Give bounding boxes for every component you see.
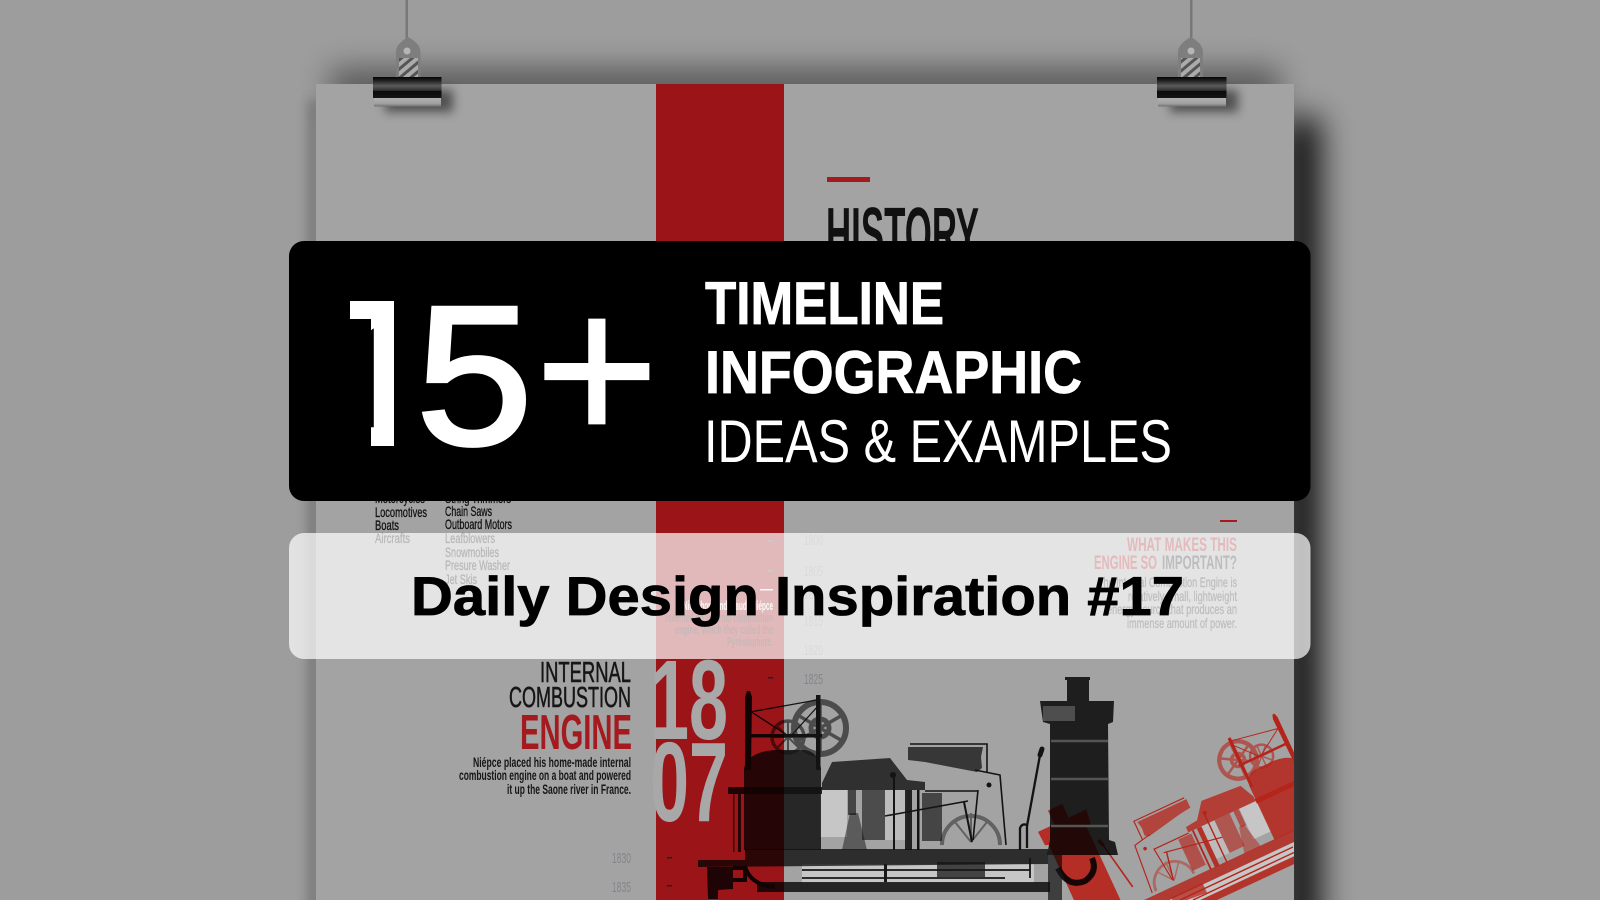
heading: internal combustion engine: COMBUSTION xyxy=(509,682,631,714)
right note: what makes this engine so important: The Internal Combustion Engine is xyxy=(1098,574,1237,590)
year: 1807 xyxy=(650,637,728,845)
paragraph: Niepce: combustion engine on a boat and powered xyxy=(459,767,631,783)
timeline ticks xyxy=(667,540,773,886)
right note: what makes this engine so important: immense amount of power. xyxy=(1127,615,1237,631)
right note: what makes this engine so important: WHAT MAKES THIS xyxy=(1127,534,1237,556)
list of engine uses, column two xyxy=(445,490,512,587)
list of engine uses, column two: Jet Skis xyxy=(445,571,477,587)
subtitle text: Daily Design Inspiration #17 xyxy=(411,565,1184,627)
poster sheet xyxy=(316,84,1294,900)
list of engine uses, column two: Leafblowers xyxy=(445,530,495,546)
title banner xyxy=(289,241,1310,501)
red vertical band xyxy=(656,84,784,900)
1805 note on red band: Pyréolophore. xyxy=(727,634,773,649)
binder clip left xyxy=(373,0,453,112)
paragraph: Niepce xyxy=(459,754,631,797)
right note: what makes this engine so important: relatively small, lightweight xyxy=(1128,588,1237,604)
1805 note on red band xyxy=(665,589,773,649)
title line: timeline: TIMELINE xyxy=(705,270,944,337)
list of engine uses, column two: Presure Washer xyxy=(445,557,510,573)
right note: what makes this engine so important: IMPORTANT? xyxy=(1162,552,1237,574)
list of engine uses, column two: Snowmobiles xyxy=(445,544,499,560)
binder clip right xyxy=(1157,0,1238,112)
list of engine uses, column one: Motorcycles xyxy=(375,490,425,506)
paragraph: Niepce: it up the Saone river in France. xyxy=(507,781,631,797)
heading: internal combustion engine xyxy=(509,657,632,760)
list of engine uses, column two: Outboard Motors xyxy=(445,516,512,532)
list of engine uses, column one: Aircrafts xyxy=(375,530,410,546)
list of engine uses, column one xyxy=(375,490,427,546)
list of engine uses, column one: Locomotives xyxy=(375,504,427,520)
poster: history of the internal combustion engine xyxy=(316,84,1336,900)
poster: history of the internal combustion engine: Nicéphore and Claude Niépce xyxy=(683,598,773,613)
big number: 15+: 1 xyxy=(326,265,436,486)
heading: internal combustion engine: INTERNAL xyxy=(540,657,631,689)
list of engine uses, column one: Boats xyxy=(375,517,399,533)
timeline years: 1825 xyxy=(804,671,823,688)
timeline years: 1815 xyxy=(804,613,823,630)
timeline years: 1810 xyxy=(804,586,823,603)
timeline years: 1830 xyxy=(612,850,631,867)
timeline years: 1820 xyxy=(804,642,823,659)
list of engine uses, column two: Chain Saws xyxy=(445,503,492,519)
big number: 15+: 5 xyxy=(416,265,533,487)
year: 1807: 07 xyxy=(650,719,728,845)
title line: infographic: INFOGRAPHIC xyxy=(705,339,1082,406)
1805 note on red band: invented an internal combustion xyxy=(665,610,773,625)
year: 1807: 18 xyxy=(650,637,728,763)
poster shadow xyxy=(308,68,1320,900)
poster: history of the internal combustion engine: HISTORY xyxy=(826,194,979,274)
timeline years: 1835 xyxy=(612,879,631,896)
right note: what makes this engine so important: energy source that produces an xyxy=(1107,601,1237,617)
timeline years: 1805 xyxy=(804,563,823,580)
illustration: red tilted engine xyxy=(1038,714,1294,900)
right note: what makes this engine so important xyxy=(1094,520,1237,631)
subtitle banner xyxy=(289,533,1310,659)
paragraph: Niepce: Niépce placed his home-made internal xyxy=(473,754,631,770)
illustration: black engine xyxy=(698,677,1118,900)
big number: 15+ xyxy=(320,250,659,487)
1805 note on red band: engine, which they called the xyxy=(675,622,773,637)
timeline years: 1800 xyxy=(804,532,823,549)
list of engine uses, column two: String Trimmers xyxy=(445,490,511,506)
heading: internal combustion engine: ENGINE xyxy=(520,706,632,760)
timeline years xyxy=(612,532,823,896)
title line: ideas and examples: IDEAS & EXAMPLES xyxy=(704,408,1172,475)
right note: what makes this engine so important: ENGINE SO xyxy=(1094,552,1157,574)
red heading dash xyxy=(827,177,870,182)
big number: 15+: + xyxy=(535,250,659,487)
